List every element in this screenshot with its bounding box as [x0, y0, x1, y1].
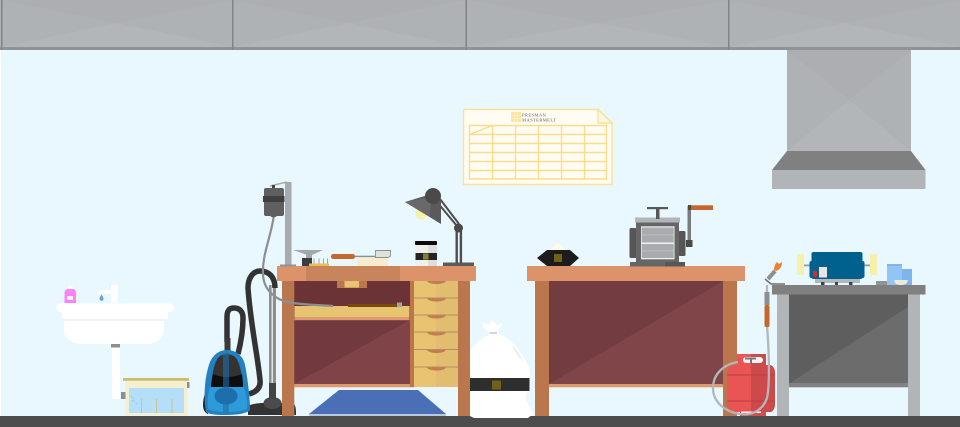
chart table grid: [470, 126, 606, 179]
pin block: [309, 258, 329, 266]
torch head: [768, 271, 775, 279]
bench 1: [277, 266, 476, 416]
bench 2: [527, 266, 745, 416]
vacuum pole: [269, 285, 276, 399]
mill side housings: [630, 228, 686, 258]
file with orange handle: [331, 254, 376, 259]
bench 2 legs: [535, 281, 737, 416]
water drop: [100, 294, 104, 301]
metal cup: [376, 250, 390, 258]
rolling mill: [630, 205, 713, 266]
vacuum cleaner: [203, 271, 296, 415]
gas bottle collar: [737, 354, 766, 365]
polishing wheels: [797, 254, 877, 275]
chart brand name: MASTERMELT: [522, 118, 556, 122]
stand pole: [270, 182, 296, 266]
sink drain pipe: [111, 344, 126, 399]
tray rod: [348, 302, 402, 307]
bench 1 legs: [282, 281, 470, 416]
bench 3 legs: [777, 294, 920, 416]
chart brand name: PRESMAN: [522, 112, 546, 118]
mill top bar: [635, 207, 680, 222]
desk lamp: [405, 188, 474, 266]
jar: [415, 241, 437, 266]
mill rollers: [641, 226, 674, 259]
torch and hose: [713, 262, 785, 414]
white sack: [470, 320, 533, 418]
drawer stack: [414, 281, 458, 387]
anvil: [293, 250, 323, 266]
black pouch: [537, 243, 579, 266]
bench tools: [293, 188, 474, 266]
bench 3: [772, 285, 926, 416]
small bench drawer: [337, 281, 367, 288]
vacuum body: [203, 338, 250, 415]
sink basin: [56, 304, 174, 344]
chart logo: [511, 112, 521, 122]
floor: [0, 416, 960, 427]
motor base and feet: [815, 279, 860, 285]
beige block: [357, 258, 388, 266]
flex shaft cable: [263, 218, 333, 306]
sink: [56, 285, 174, 399]
stand motor: [263, 185, 284, 218]
gas bottle body: [727, 365, 775, 416]
wall chart: [464, 110, 612, 184]
flame: [774, 262, 782, 271]
blue jars: [876, 264, 912, 285]
polishing motor: [797, 252, 877, 285]
bench 1 top: [277, 266, 476, 281]
bench 2 top: [527, 266, 745, 281]
soap bottle: [64, 286, 76, 303]
torch holder: [765, 279, 785, 284]
gas bottle: [727, 354, 775, 416]
motor switch: [813, 271, 817, 277]
chart brand name: [522, 112, 556, 122]
ultrasonic tank: [123, 378, 190, 416]
bench tray: [294, 306, 410, 320]
vacuum hose: [227, 271, 275, 394]
vacuum floor head: [248, 397, 296, 415]
bench 1 back panel: [294, 281, 414, 387]
wall cabinets: [0, 0, 960, 50]
faucet: [98, 285, 118, 303]
motor label: [819, 267, 827, 278]
flex shaft motor stand: [263, 182, 333, 306]
motor body: [810, 252, 864, 279]
extractor hood: [772, 50, 926, 189]
motor axles: [804, 264, 870, 266]
mill frame: [636, 222, 679, 263]
mill crank: [686, 205, 713, 247]
bench 2 back panel: [549, 281, 723, 387]
gas hose: [713, 285, 769, 414]
bench 3 back panel: [789, 294, 908, 387]
floor mat: [309, 390, 446, 416]
bench 3 top: [772, 285, 926, 294]
torch handle: [764, 292, 770, 327]
mill base: [630, 262, 685, 266]
